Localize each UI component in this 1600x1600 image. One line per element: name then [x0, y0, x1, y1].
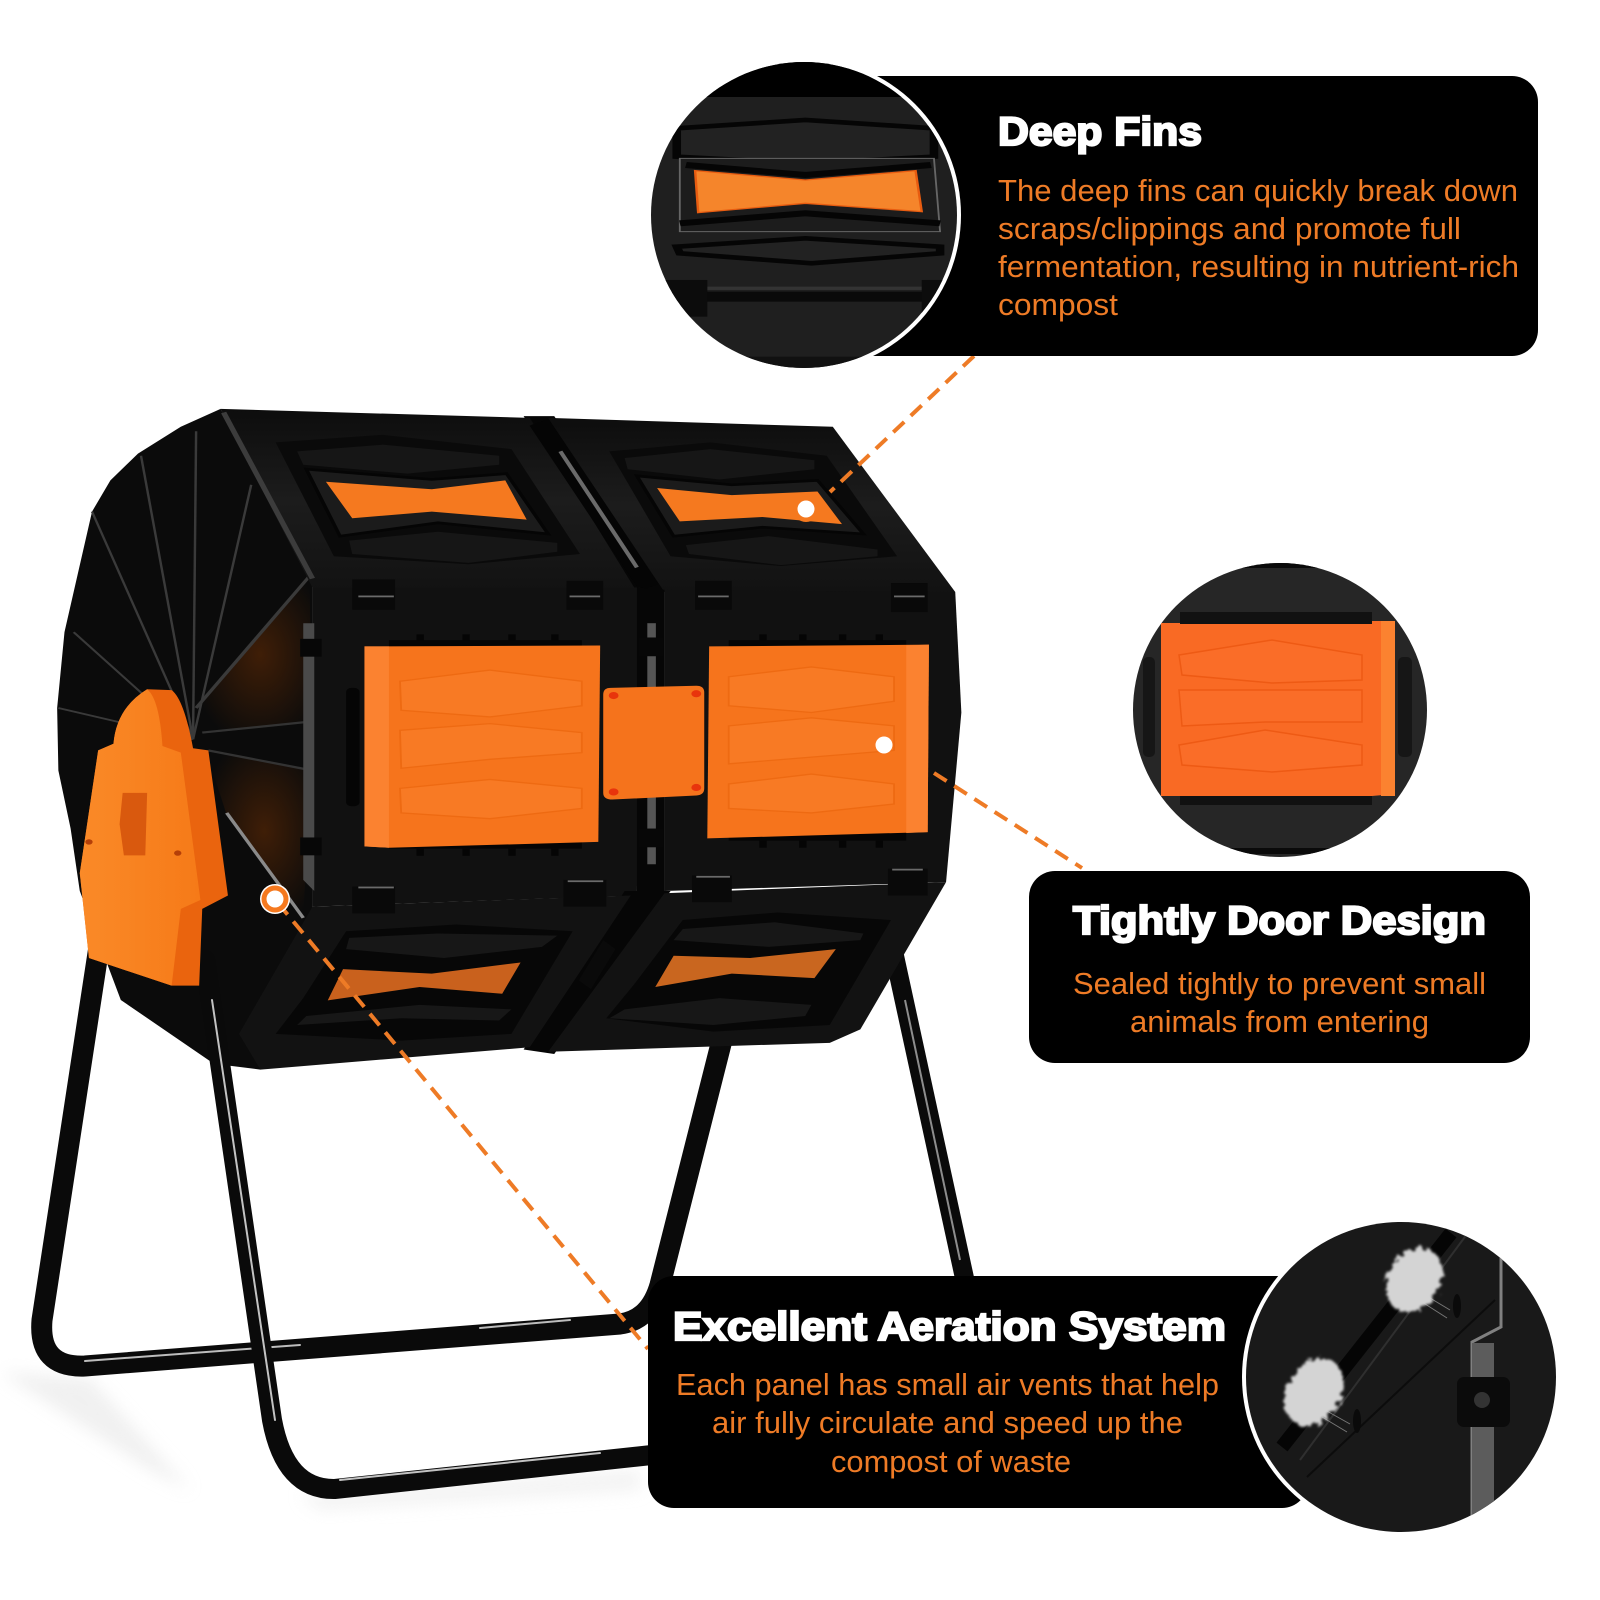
zoom circle: door [1130, 560, 1430, 857]
heading: Excellent Aeration System [673, 1305, 1226, 1349]
orange rotation handle [80, 689, 228, 986]
leader line: door design [934, 773, 1082, 868]
panel background [1029, 871, 1530, 1063]
panel background [648, 1276, 1308, 1508]
left door [364, 646, 600, 848]
front leg frame [205, 960, 670, 1489]
orange bottom window left [328, 962, 521, 1000]
right door [707, 645, 929, 838]
body text: air fully circulate and speed up the [712, 1405, 1183, 1440]
rear leg frame [42, 940, 722, 1366]
body text: fermentation, resulting in nutrient-rich [998, 249, 1519, 284]
body text [1073, 966, 1486, 1039]
body text: compost of waste [831, 1444, 1071, 1479]
leader line: aeration system [278, 903, 648, 1349]
body text: Each panel has small air vents that help [676, 1367, 1219, 1402]
heading: Tightly Door Design [1073, 899, 1486, 943]
body text: Sealed tightly to prevent small [1073, 966, 1486, 1001]
zoom circle: deep fins [651, 62, 961, 368]
hotspot dot: door [876, 736, 892, 754]
panel: tightly door design [1029, 871, 1530, 1063]
middle panels [300, 587, 961, 907]
body text: animals from entering [1130, 1004, 1429, 1039]
panel: deep fins [640, 50, 1538, 380]
panel: excellent aeration system [648, 1218, 1560, 1540]
leader line: deep fins [830, 356, 974, 492]
panel background [840, 76, 1538, 356]
hotspot dot: fins [793, 496, 819, 522]
zoom circle: air vents [1242, 1218, 1560, 1540]
heading: Deep Fins [998, 110, 1202, 154]
body text: The deep fins can quickly break down [998, 173, 1518, 208]
compost drum body [57, 409, 961, 1070]
hotspot dot: aeration [260, 884, 290, 914]
hinges [352, 579, 928, 913]
fan end cap [57, 409, 312, 1070]
body text: compost [998, 287, 1118, 322]
orange top window right [657, 488, 842, 524]
body text [998, 173, 1519, 322]
center orange connector plate [603, 686, 704, 800]
orange top window left [326, 480, 527, 520]
top panels [221, 409, 955, 592]
bottom panels [239, 882, 946, 1070]
body text: scraps/clippings and promote full [998, 211, 1461, 246]
body text [676, 1367, 1219, 1479]
ground shadows [0, 1372, 640, 1510]
orange bottom window right [655, 949, 836, 987]
right front leg [893, 949, 966, 1285]
